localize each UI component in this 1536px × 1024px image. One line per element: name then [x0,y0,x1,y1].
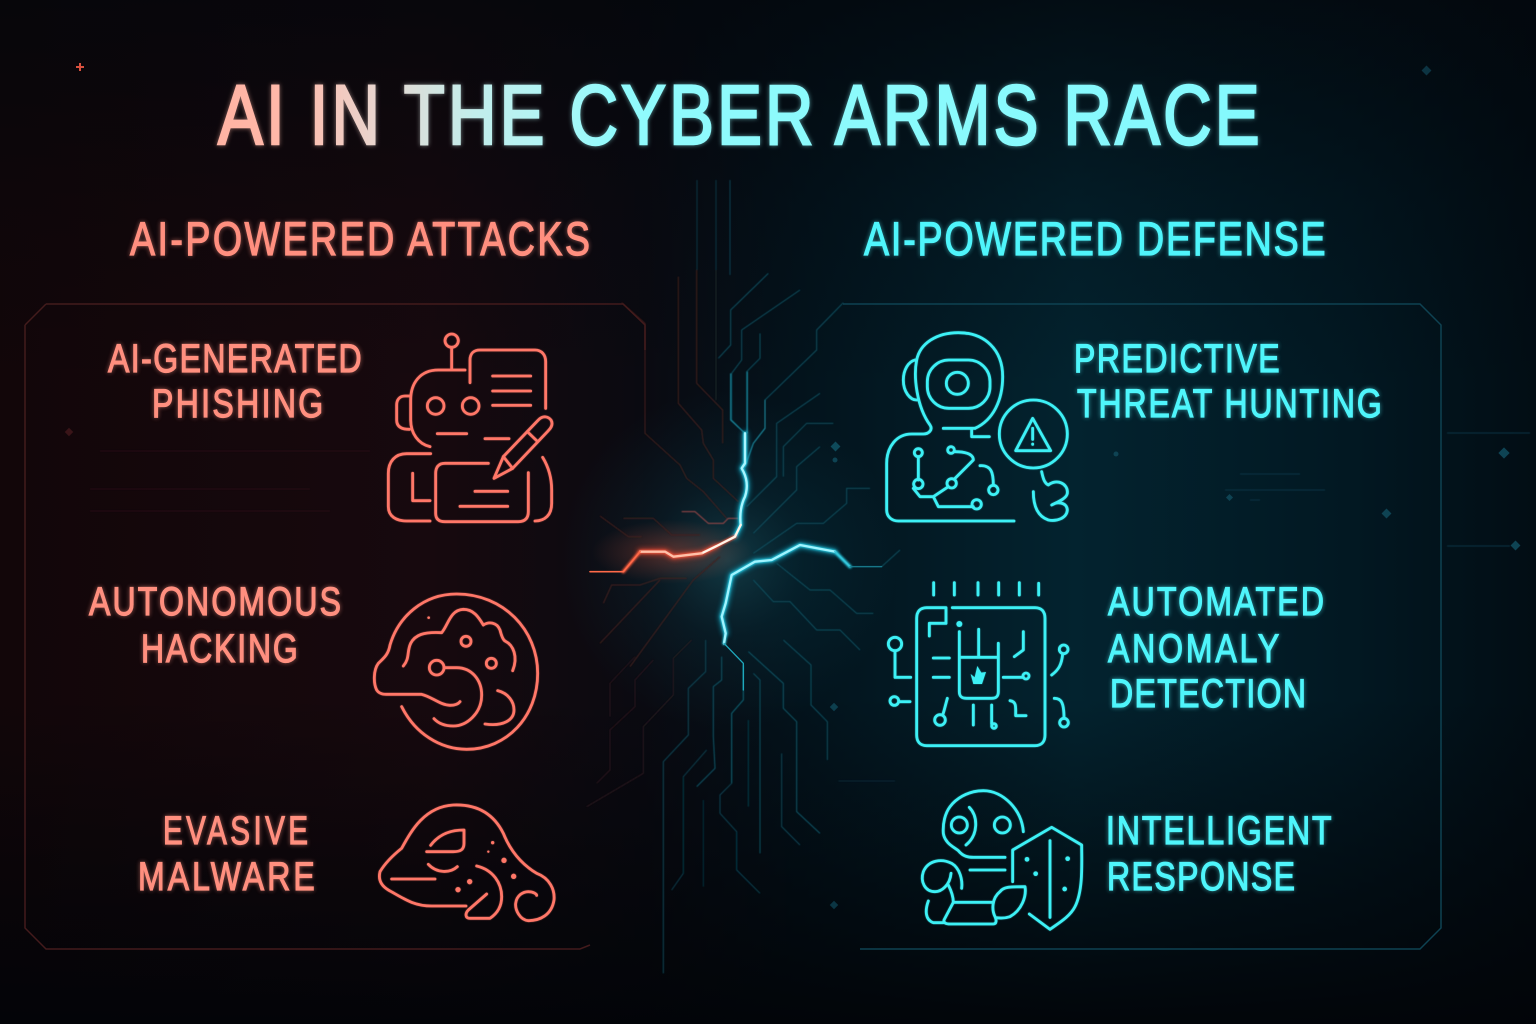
label: AI-generated phishing: PHISHING [152,381,323,426]
heading: attacks: AI-POWERED ATTACKS [130,213,590,266]
icon: brain [374,594,538,749]
circuit traces [90,180,1530,973]
label: automated anomaly detection: DETECTION [1110,671,1306,716]
label: predictive threat hunting [1074,336,1382,426]
heading: defense: AI-POWERED DEFENSE [864,213,1326,266]
icon: circuit chip [888,583,1068,746]
label: autonomous hacking [89,579,341,671]
label: automated anomaly detection: AUTOMATED [1108,579,1324,624]
label: predictive threat hunting: THREAT HUNTING [1077,381,1382,426]
label: autonomous hacking: HACKING [141,626,298,671]
lightning: defense and attack clash [590,433,882,690]
icon: chameleon [379,805,554,921]
label: AI-generated phishing [108,336,362,426]
label: evasive malware [138,809,315,899]
label: automated anomaly detection: ANOMALY [1108,626,1279,671]
label: intelligent response [1106,808,1332,899]
icon: robot with shield [922,791,1082,929]
icon: robot writing document [388,334,552,522]
label: evasive malware: EVASIVE [163,809,308,853]
label: intelligent response: INTELLIGENT [1106,808,1332,853]
label: evasive malware: MALWARE [138,854,315,899]
label: autonomous hacking: AUTONOMOUS [89,579,341,624]
particles [65,63,1520,909]
label: predictive threat hunting: PREDICTIVE [1074,336,1280,381]
icon: robot with warning magnifier [887,333,1067,521]
panel: attacks [25,213,645,949]
title: AI IN THE CYBER ARMS RACE [218,69,1260,163]
panel frame: attacks [25,304,645,949]
panel frame: defense [843,304,1441,949]
label: automated anomaly detection [1108,579,1324,716]
label: AI-generated phishing: AI-GENERATED [108,336,362,381]
label: intelligent response: RESPONSE [1107,854,1295,899]
panel: defense [843,213,1441,949]
